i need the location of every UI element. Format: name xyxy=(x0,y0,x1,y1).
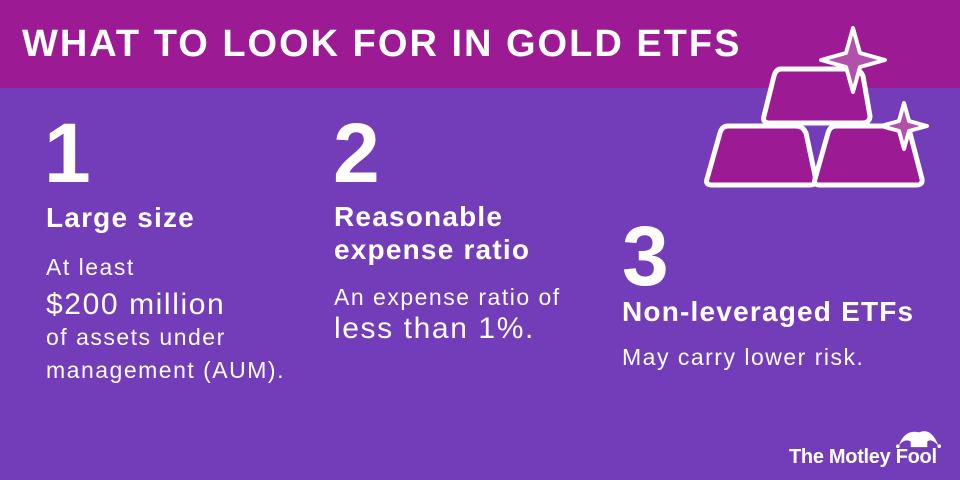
icon: gold bars with sparkles xyxy=(704,26,929,188)
item 2 xyxy=(333,106,561,345)
logo: The Motley Fool xyxy=(789,431,942,468)
item 3: 3 xyxy=(622,209,669,303)
item 2: An expense ratio of xyxy=(334,284,561,310)
item 1: $200 million xyxy=(46,288,225,321)
item 2: Reasonable xyxy=(334,201,503,232)
item 1: of assets under xyxy=(46,324,226,350)
header band xyxy=(0,0,960,88)
item 1: management (AUM). xyxy=(46,357,285,383)
title: WHAT TO LOOK FOR IN GOLD ETFS xyxy=(22,23,741,65)
item 1: At least xyxy=(46,254,135,280)
item 2: less than 1%. xyxy=(334,312,535,345)
item 3: May carry lower risk. xyxy=(622,344,864,370)
item 3 xyxy=(622,209,914,370)
item 1: 1 xyxy=(44,106,91,200)
item 3: Non-leveraged ETFs xyxy=(622,296,914,327)
item 1: Large size xyxy=(46,202,195,233)
item 2: 2 xyxy=(333,106,380,200)
item 2: expense ratio xyxy=(334,234,530,265)
logo: The Motley Fool: The Motley Fool xyxy=(789,446,937,468)
item 1 xyxy=(44,106,285,383)
